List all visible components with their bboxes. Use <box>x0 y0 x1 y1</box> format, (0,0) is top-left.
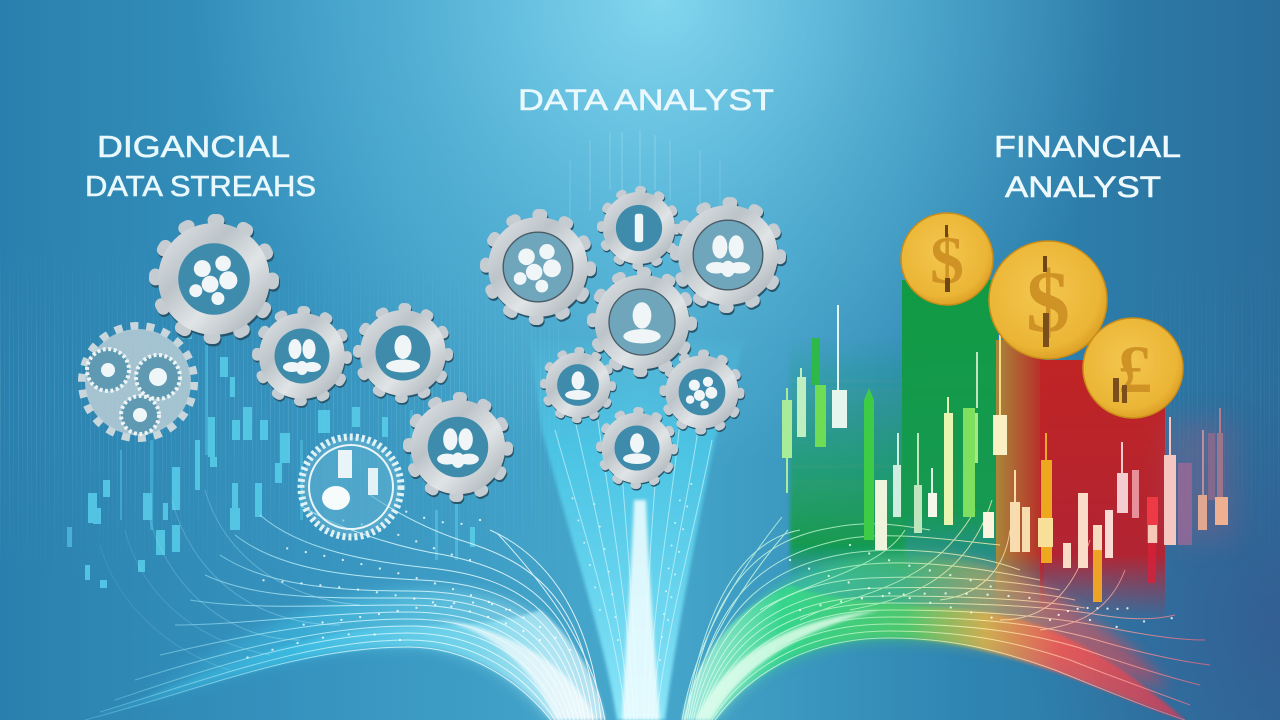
heading: digital data streams: DIGANCIAL <box>97 129 290 164</box>
gear: bottom <box>600 411 675 486</box>
gear: top left <box>156 220 274 340</box>
heading: financial analyst: ANALYST <box>1005 171 1161 204</box>
gear: people <box>257 311 348 403</box>
colour columns under coins <box>790 280 1235 620</box>
data stream bars: left <box>67 323 475 588</box>
fiber fan: left <box>85 490 605 720</box>
gear: person <box>358 308 449 400</box>
central fiber beam <box>530 130 745 720</box>
gear: pale compound gear <box>82 326 194 438</box>
gear: top right <box>676 203 781 309</box>
coin: left dollar <box>901 213 993 305</box>
gear: lower right <box>664 354 741 432</box>
heading: digital data streams: DATA STREAHS <box>85 171 316 203</box>
coin: right pound: £ <box>1118 331 1152 407</box>
heading: financial analyst <box>994 129 1181 204</box>
fiber fan: right <box>682 500 1210 720</box>
coins <box>901 213 1183 418</box>
gear: lower right people <box>408 398 508 498</box>
gear: lower left <box>544 351 613 421</box>
coin: middle dollar <box>989 241 1107 359</box>
candlestick chart <box>782 305 1228 602</box>
gear: glass gear <box>301 437 401 537</box>
heading: digital data streams <box>85 129 316 203</box>
coin: left dollar: $ <box>930 222 964 298</box>
gear: top small <box>601 190 677 267</box>
coin: right pound <box>1083 318 1183 418</box>
gear: top left cluster <box>486 215 591 321</box>
coin: middle dollar: $ <box>1026 254 1070 351</box>
gears: left cluster <box>82 220 508 537</box>
gears: centre cluster <box>486 190 781 486</box>
heading: data analyst: DATA ANALYST <box>518 84 774 117</box>
gear: central person <box>592 272 692 373</box>
heading: financial analyst: FINANCIAL <box>994 129 1181 164</box>
